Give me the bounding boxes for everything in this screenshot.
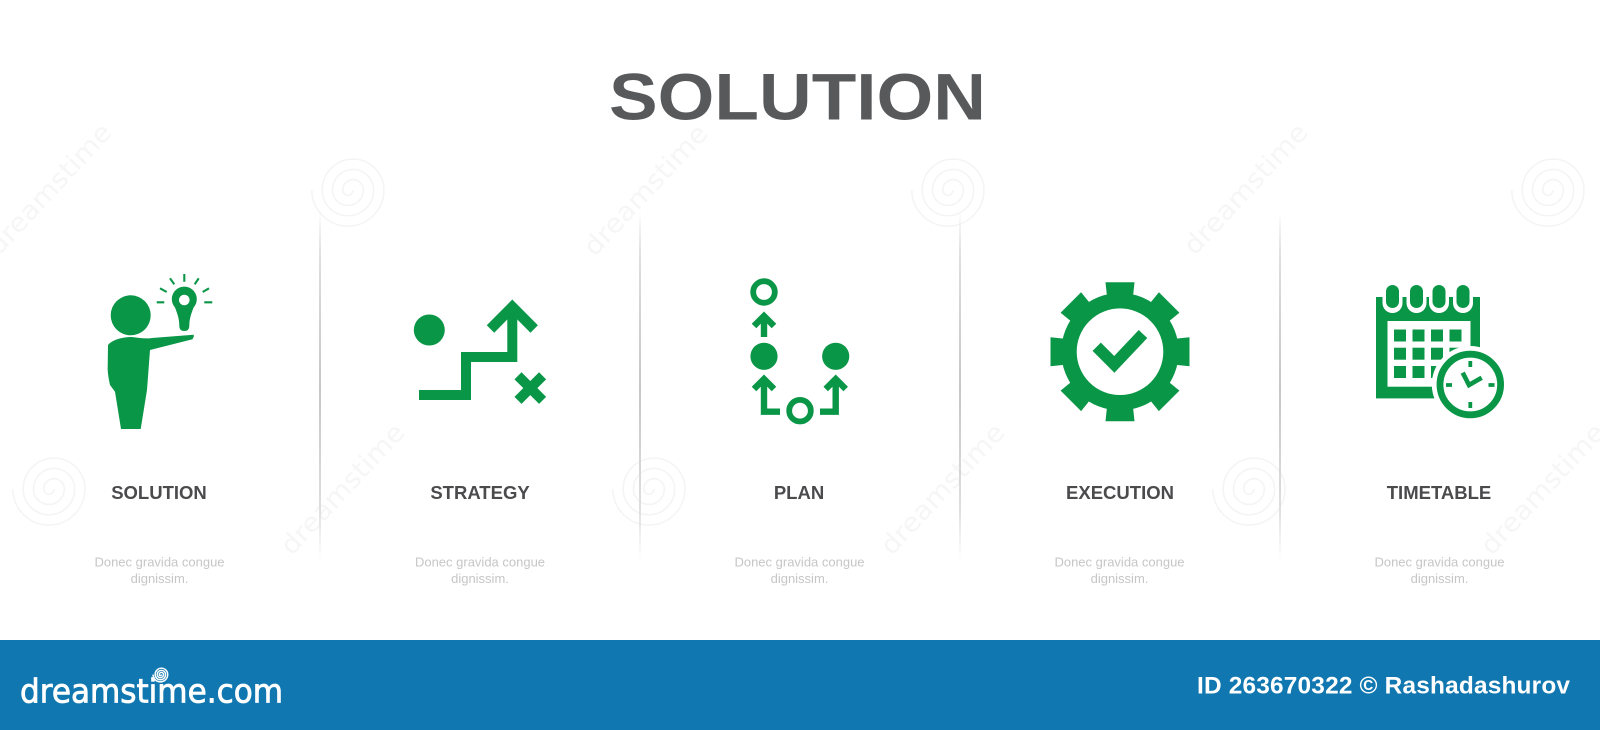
watermark: spirals and diagonal text: [0, 118, 1600, 561]
label: solution: SOLUTION: [111, 482, 207, 503]
description: timetable: Donec gravida congue: [1374, 554, 1505, 570]
description: plan: dignissim.: [771, 571, 828, 586]
description: execution: Donec gravida congue: [1054, 554, 1185, 570]
footer logo: dreamstime.com: dreamstime.com: [20, 672, 283, 710]
icon: calendar with clock: [1376, 280, 1509, 423]
description: strategy: dignissim.: [451, 571, 509, 586]
description: solution: Donec gravida congue: [94, 554, 225, 570]
watermark: spirals and diagonal text: dreamstime: [578, 119, 714, 262]
watermark: spirals and diagonal text: dreamstime: [875, 418, 1011, 561]
title: SOLUTION: [609, 60, 986, 134]
panel: timetable: [1374, 280, 1509, 586]
description: execution: dignissim.: [1091, 571, 1148, 586]
icon: play diagram of circles and arrows: [750, 281, 849, 422]
icon: gear with check mark: [1050, 282, 1190, 421]
description: plan: Donec gravida congue: [734, 554, 865, 570]
panel: strategy: [414, 307, 545, 586]
icon: stairs arrow with circle and cross: [414, 307, 543, 400]
icon: person with light bulb: [108, 274, 212, 429]
panel: plan: [734, 281, 865, 586]
description: timetable: dignissim.: [1411, 571, 1468, 586]
label: plan: PLAN: [774, 482, 824, 503]
watermark: spirals and diagonal text: dreamstime: [275, 418, 411, 561]
label: strategy: STRATEGY: [430, 482, 530, 503]
panel: solution: [94, 274, 225, 586]
description: strategy: Donec gravida congue: [415, 554, 545, 570]
footer credit: ID 263670322 © Rashadashurov: [1197, 672, 1570, 699]
watermark: spirals and diagonal text: dreamstime: [1475, 418, 1600, 561]
panel: execution: [1050, 282, 1190, 586]
description: solution: dignissim.: [131, 571, 188, 586]
label: timetable: TIMETABLE: [1387, 482, 1491, 503]
watermark: spirals and diagonal text: dreamstime: [1178, 118, 1314, 261]
label: execution: EXECUTION: [1066, 482, 1174, 503]
footer bar: [0, 640, 1600, 730]
